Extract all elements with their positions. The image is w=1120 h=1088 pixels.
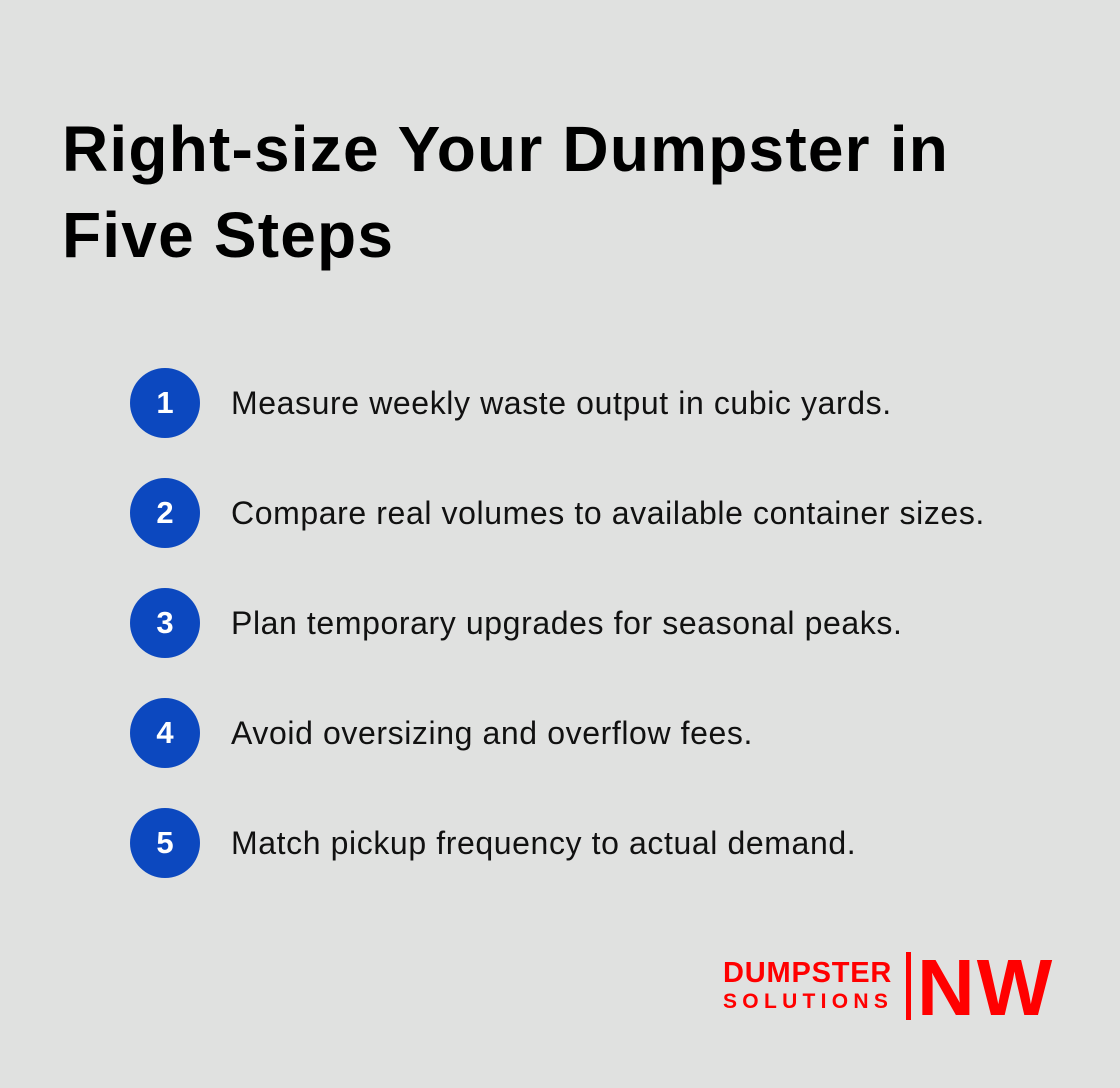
title: Five Steps	[62, 199, 394, 271]
step 2: Compare real volumes to available container sizes.	[231, 495, 985, 531]
step 2: 2	[156, 495, 174, 530]
step 1	[130, 368, 892, 438]
step 4: 4	[156, 715, 174, 750]
step 1: 1	[156, 385, 174, 420]
step 3: 3	[156, 605, 174, 640]
logo	[723, 943, 1054, 1032]
step 3	[130, 588, 903, 658]
step 4: Avoid oversizing and overflow fees.	[231, 715, 753, 751]
step 1: Measure weekly waste output in cubic yards.	[231, 385, 892, 421]
step 5	[130, 808, 856, 878]
step 3: Plan temporary upgrades for seasonal peaks.	[231, 605, 903, 641]
title: Right-size Your Dumpster in	[62, 113, 949, 185]
logo: NW	[917, 943, 1054, 1032]
logo: DUMPSTER	[723, 957, 892, 989]
step 2	[130, 478, 985, 548]
step 5: Match pickup frequency to actual demand.	[231, 825, 856, 861]
step 4	[130, 698, 753, 768]
logo: SOLUTIONS	[723, 990, 893, 1013]
step 5: 5	[156, 825, 174, 860]
title	[62, 113, 949, 271]
